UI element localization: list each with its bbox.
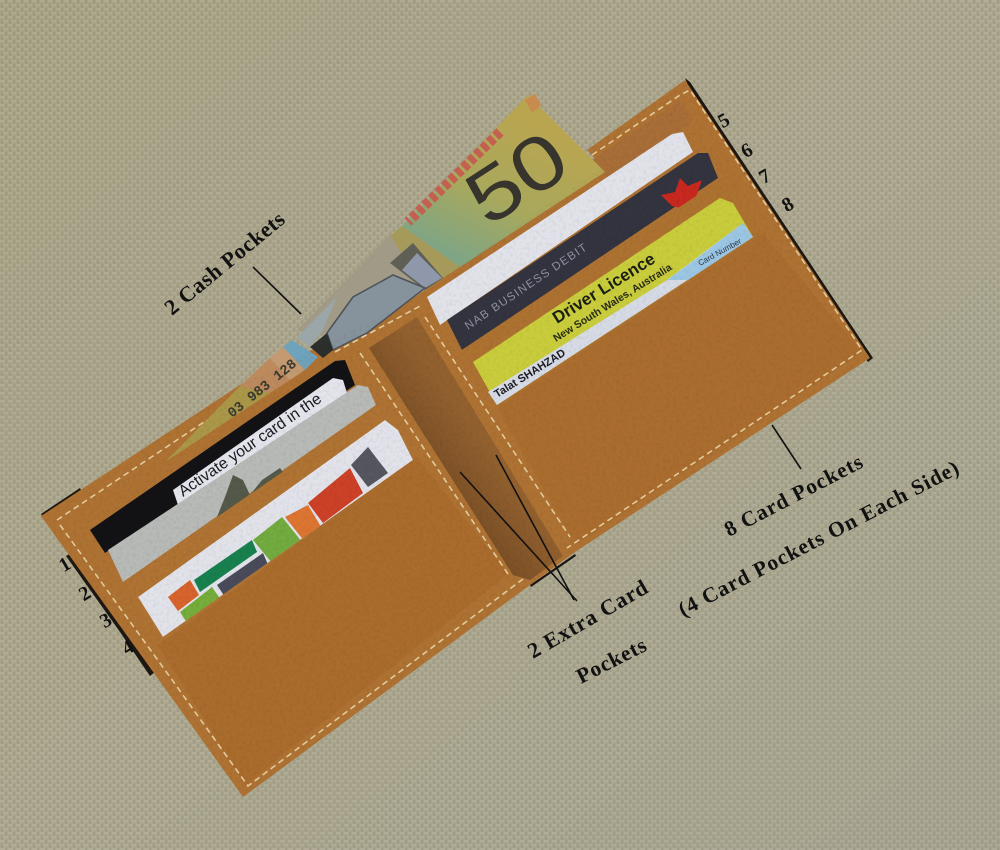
stitching: [57, 90, 862, 786]
pocket numbers: [55, 109, 798, 660]
leather texture: [40, 80, 870, 800]
licence title: Driver Licence: [549, 249, 659, 327]
left colour block card: [138, 420, 413, 637]
note stripes: [408, 132, 500, 222]
left flap: white activation card: [173, 378, 347, 505]
right inner band: [457, 177, 763, 408]
note blue panel: [402, 253, 442, 288]
pocket numbers: 6: [737, 139, 757, 163]
pocket numbers: 2: [75, 582, 95, 606]
licence name: Talat SHAHZAD: [492, 347, 568, 401]
left flap: black card: [90, 360, 355, 553]
note corner: [525, 94, 541, 113]
pocket numbers: 4: [118, 636, 138, 660]
label: Pockets: Pockets: [572, 633, 651, 688]
wallet body: [41, 80, 870, 797]
banknote: [165, 94, 605, 462]
driver licence card: [473, 198, 753, 405]
licence subtitle: New South Wales, Australia: [551, 261, 674, 345]
maple logo: [661, 178, 702, 208]
label: 4 card pockets on each side: (4 Card Pockets On Each Side): [674, 455, 964, 621]
pocket numbers: 3: [96, 609, 116, 633]
right front pocket: [497, 233, 862, 545]
card label: NAB BUSINESS DEBIT: [463, 241, 590, 332]
left inner band: [123, 406, 430, 645]
pocket numbers: 8: [778, 193, 798, 217]
note portrait: [327, 275, 425, 350]
note denomination: 50: [450, 114, 583, 241]
top right inner tab: [592, 100, 692, 182]
NAB debit card: [447, 153, 718, 350]
licence number label: Card Number: [697, 236, 743, 268]
note serial: 03 983 128: [225, 357, 300, 422]
note dark frame: [390, 243, 443, 290]
pocket numbers: 5: [714, 109, 734, 133]
pocket numbers: 7: [755, 165, 775, 189]
callout line: card pockets: [772, 425, 801, 469]
tree on card: [217, 468, 283, 517]
label: 2 Cash Pockets: 2 Cash Pockets: [159, 206, 290, 320]
wallet shadow edge: [41, 78, 873, 676]
left flap: grey card: [108, 385, 376, 582]
white card: [427, 132, 693, 325]
pocket numbers: 1: [55, 553, 75, 577]
activation text: Activate your card in the: [176, 390, 325, 500]
left front pocket: [158, 457, 508, 785]
note pale panel: [297, 235, 425, 340]
callout line: cash pockets: [253, 267, 301, 314]
label: 2 Extra Card: 2 Extra Card: [523, 574, 653, 663]
spine: [369, 317, 563, 580]
label: 8 Card Pockets: 8 Card Pockets: [720, 449, 868, 541]
callout lines: extra card pockets: [460, 455, 577, 601]
note olive panel: [390, 226, 460, 290]
